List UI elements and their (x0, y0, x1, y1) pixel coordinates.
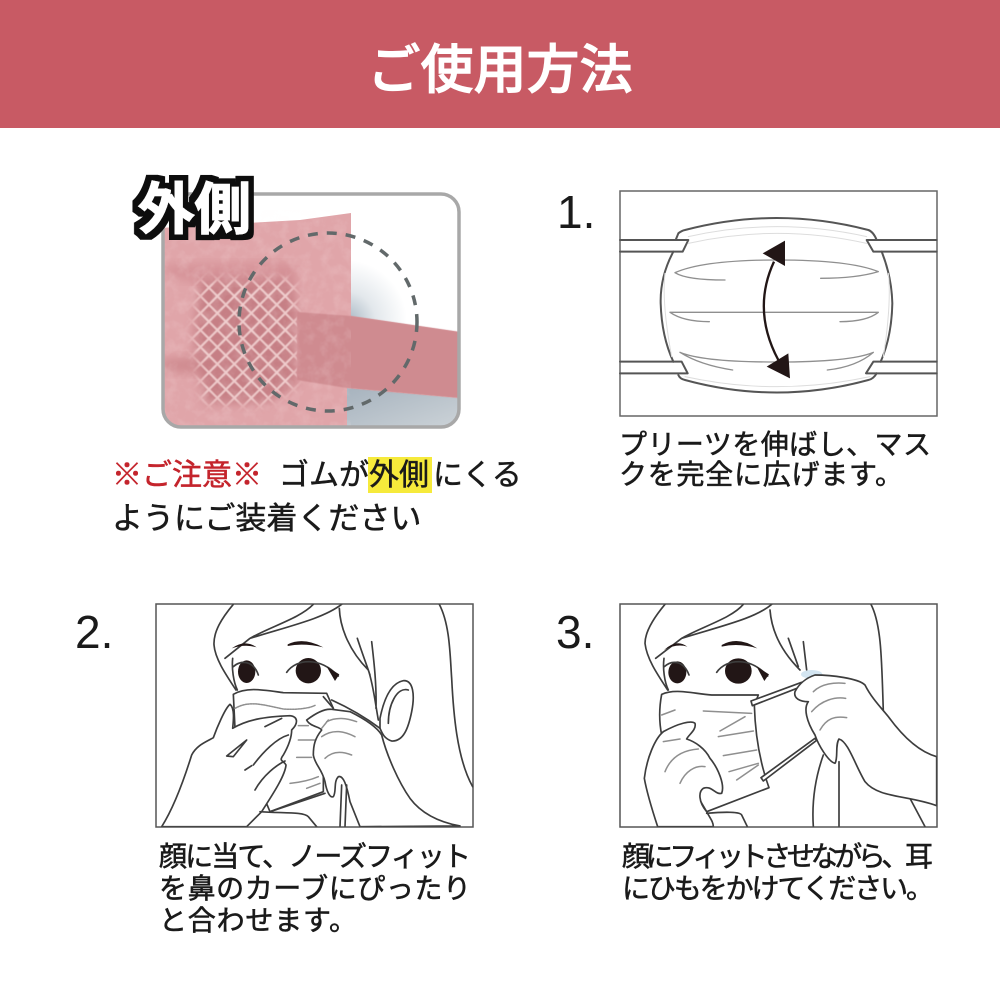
photo frame (163, 194, 459, 427)
woman hooking ear loops (644, 604, 937, 827)
arrow: up and down (763, 241, 790, 378)
step number 1: 1. (557, 186, 595, 238)
title: ご使用方法 (368, 41, 632, 100)
caution line one: にくる (433, 459, 522, 492)
photo content (160, 210, 460, 430)
step 2 caption (159, 841, 471, 936)
photo background (163, 194, 459, 427)
line one: プリーツを伸ばし、マス (619, 429, 931, 460)
line three: と合わせます。 (159, 905, 357, 936)
frame (156, 604, 473, 827)
frame (620, 604, 937, 827)
panel: step 1 mask diagram (620, 191, 937, 416)
line two: にひもをかけてください。 (622, 873, 934, 904)
caution line one: 外側 (369, 459, 429, 492)
caution line one: ※ご注意※ (112, 459, 262, 492)
header band (0, 0, 1000, 128)
mask drawing (620, 218, 937, 392)
dashed circle (239, 233, 417, 411)
line two: クを完全に広げます。 (619, 459, 903, 490)
step 3 caption (622, 841, 934, 904)
woman fitting nose wire (162, 604, 473, 827)
highlight (368, 457, 432, 493)
caution line one: ゴムが (279, 459, 369, 492)
step 1 caption (619, 429, 931, 490)
step number 2: 2. (75, 606, 113, 658)
caution text (112, 457, 522, 536)
caution line two: ようにご装着ください (112, 501, 421, 536)
line one: 顔に当て、ノーズフィット (159, 841, 471, 872)
label: outside: 外側 (138, 178, 251, 241)
line two: を鼻のカーブにぴったり (159, 873, 471, 904)
panel: step 3 illustration (620, 604, 937, 827)
panel: outside of mask photo (138, 178, 460, 430)
step number 3: 3. (556, 606, 594, 658)
panel: step 2 illustration (156, 604, 473, 827)
frame (620, 191, 937, 416)
line one: 顔にフィットさせながら、耳 (622, 841, 933, 872)
